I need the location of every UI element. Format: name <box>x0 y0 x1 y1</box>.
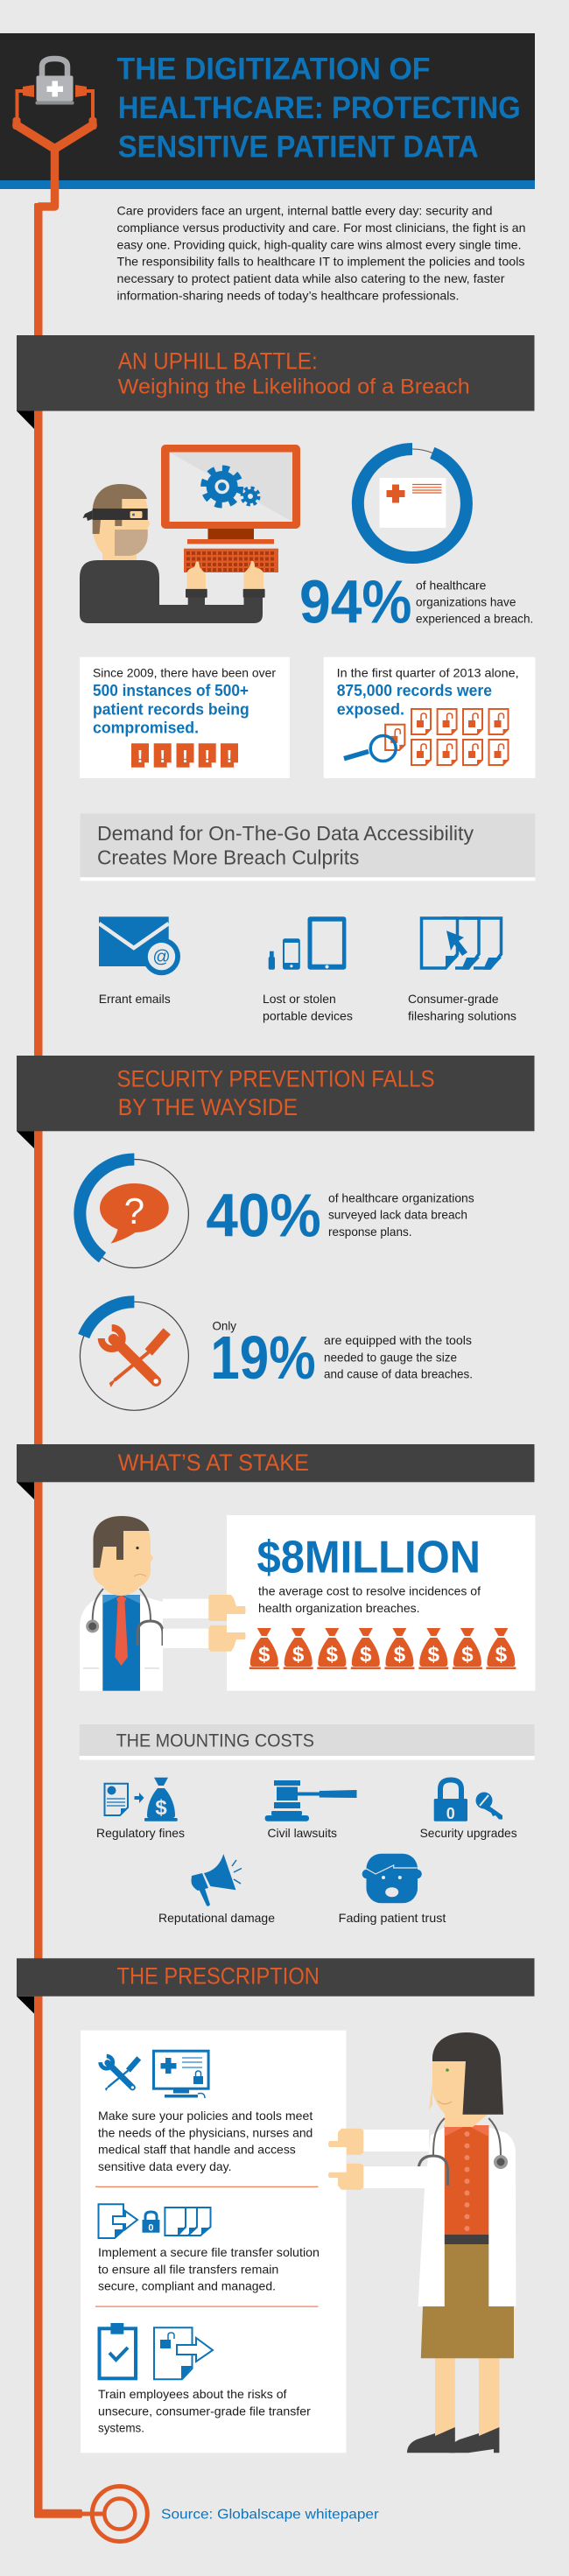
culprit: errant emails <box>99 916 180 1006</box>
icons: unlocked documents <box>385 709 508 765</box>
card: 875,000 records: exposed. <box>337 701 404 719</box>
icon: padlock and key: 0 <box>446 1805 455 1822</box>
stat: 19 percent: Only <box>212 1318 236 1332</box>
title: SENSITIVE PATIENT DATA <box>118 130 479 164</box>
step 1: the needs of the physicians, nurses and <box>98 2125 313 2139</box>
icons: money bags: $ <box>360 1643 372 1667</box>
section band: security prevention: BY THE WAYSIDE <box>118 1094 298 1120</box>
icon: shared files with cursor <box>422 918 502 970</box>
chart: 40 percent ring <box>80 1159 188 1267</box>
icon: medical monitor <box>154 2051 208 2098</box>
icons: alert documents: ! <box>137 748 143 767</box>
card: 8 million cost: the average cost to resolve incidences of <box>258 1584 481 1598</box>
cost: security upgrades <box>420 1780 517 1840</box>
title: HEALTHCARE: PROTECTING <box>118 91 521 125</box>
step 2: to ensure all file transfers remain <box>98 2262 278 2276</box>
illustration: male doctor <box>80 1516 245 1691</box>
culprit: portable devices <box>263 916 353 1022</box>
step 3 <box>98 2323 311 2435</box>
intro paragraph: Care providers face an urgent, internal battle every day: security and <box>117 204 492 218</box>
step 1: Make sure your policies and tools meet <box>98 2109 313 2123</box>
card: 875,000 records: 875,000 records were <box>337 682 492 699</box>
icon: magnifier <box>344 735 396 762</box>
stat: 94 percent: experienced a breach. <box>416 612 533 626</box>
hacker figure <box>80 484 265 623</box>
step 3: Train employees about the risks of <box>98 2387 287 2401</box>
culprit: filesharing solutions: Consumer-grade <box>408 992 499 1006</box>
icon: worried face <box>362 1854 422 1903</box>
arms <box>363 2130 429 2188</box>
section band: an uphill battle: Weighing the Likelihood of a Breach <box>118 375 470 398</box>
icon: gavel <box>265 1780 357 1821</box>
intro paragraph: necessary to protect patient data while also catering to the new, faster <box>117 271 505 285</box>
subheading: demand for data accessibility <box>81 813 535 881</box>
section band: security prevention <box>17 1056 534 1148</box>
stat: 94 percent: of healthcare <box>416 578 487 592</box>
cost: security upgrades: Security upgrades <box>420 1826 517 1840</box>
section band: security prevention: SECURITY PREVENTION FALLS <box>117 1066 434 1092</box>
skirt <box>421 2244 514 2358</box>
icon: stethoscope <box>418 2118 508 2186</box>
icon: megaphone <box>191 1854 242 1906</box>
culprit: filesharing solutions: filesharing solutions <box>408 1008 516 1022</box>
stat: 19 percent: 19% <box>210 1323 316 1392</box>
culprit: errant emails: Errant emails <box>99 992 171 1006</box>
intro cable stem <box>39 151 54 207</box>
hands <box>208 1595 245 1652</box>
illustration: hacker at computer <box>80 445 300 623</box>
section band: what's at stake <box>17 1444 534 1499</box>
icons: money bags: $ <box>428 1643 440 1667</box>
step 1: sensitive data every day. <box>98 2159 231 2173</box>
icons: alert documents: ! <box>159 748 165 767</box>
icons: money bags: $ <box>292 1643 305 1667</box>
section band: the prescription: THE PRESCRIPTION <box>117 1963 320 1990</box>
icon: blue tools <box>101 2056 139 2091</box>
header panel <box>0 33 535 210</box>
intro paragraph: compliance versus productivity and care. For most clinicians, the fight is an <box>117 221 525 235</box>
intro paragraph: The responsibility falls to healthcare IT to implement the policies and tools <box>117 255 525 269</box>
subheading: the mounting costs <box>80 1724 535 1760</box>
icons: money bags: $ <box>327 1643 339 1667</box>
title <box>117 53 521 164</box>
stat: 94 percent: organizations have <box>416 595 516 609</box>
stat: 40 percent: response plans. <box>328 1225 411 1239</box>
hands <box>328 2129 363 2190</box>
stat: 40 percent: 40% <box>206 1181 321 1249</box>
card: 500 instances: patient records being <box>93 701 249 719</box>
intro paragraph <box>117 204 525 302</box>
orange stethoscope cable line <box>34 203 42 2517</box>
chart: 19 percent ring <box>80 1302 188 1410</box>
section band: an uphill battle: AN UPHILL BATTLE: <box>118 348 318 375</box>
title: THE DIGITIZATION OF <box>117 53 431 87</box>
lab coat <box>418 2127 516 2306</box>
card: 500 instances <box>80 657 290 778</box>
icon: unsecure file transfer <box>154 2327 213 2380</box>
keyboard <box>184 549 278 572</box>
monitor <box>161 445 300 544</box>
stat: 19 percent: are equipped with the tools <box>324 1333 472 1347</box>
legs and shoes <box>407 2358 499 2453</box>
intro paragraph: information-sharing needs of today’s healthcare professionals. <box>117 288 459 302</box>
step 2: Implement a secure file transfer solution <box>98 2245 320 2259</box>
icon: question speech bubble: ? <box>124 1190 144 1232</box>
stat: 40 percent: of healthcare organizations <box>328 1190 474 1204</box>
icon: envelope: @ <box>152 947 171 966</box>
card: 500 instances: Since 2009, there have been over <box>93 665 276 679</box>
cost: reputational damage: Reputational damage <box>158 1911 275 1925</box>
icons: alert documents: ! <box>182 748 188 767</box>
icons: money bags: $ <box>258 1643 270 1667</box>
icon: wrench and screwdriver <box>102 1328 167 1387</box>
card: 875,000 records: In the first quarter of 2013 alone, <box>337 665 519 679</box>
subheading: the mounting costs: THE MOUNTING COSTS <box>116 1731 314 1751</box>
icons: alert documents: ! <box>204 748 210 767</box>
card: 500 instances: compromised. <box>93 719 199 736</box>
icon: usb phone tablet <box>269 916 346 970</box>
icons: money bags: $ <box>394 1643 406 1667</box>
card: 8 million cost: health organization breaches. <box>258 1601 420 1615</box>
icon: clipboard check <box>100 2323 136 2378</box>
panel: prescription steps <box>81 2031 346 2453</box>
icons: money bags <box>249 1628 516 1669</box>
cost: civil lawsuits: Civil lawsuits <box>268 1826 337 1840</box>
icons: alert documents: ! <box>227 748 232 767</box>
section band: an uphill battle <box>17 335 534 429</box>
card: 875,000 records <box>324 657 535 778</box>
step 1 <box>98 2051 313 2173</box>
illustration: female doctor <box>328 2032 516 2453</box>
icons: alert documents <box>131 743 238 768</box>
cost: regulatory fines <box>96 1778 185 1840</box>
stat: 94 percent: 94% <box>299 568 411 636</box>
section band: what's at stake: WHAT’S AT STAKE <box>118 1449 309 1476</box>
icon: secure file transfer: 0 <box>148 2223 153 2234</box>
culprit: portable devices: portable devices <box>263 1008 353 1022</box>
culprit: filesharing solutions <box>408 918 516 1022</box>
icon: stethoscope with padlock <box>12 59 96 210</box>
subheading: demand for data accessibility: Demand for On-The-Go Data Accessibility <box>97 822 474 845</box>
stat: 19 percent: needed to gauge the size <box>324 1350 457 1364</box>
step 2: secure, compliant and managed. <box>98 2279 276 2293</box>
stat: 19 percent <box>210 1318 473 1392</box>
source: Source: Globalscape whitepaper <box>161 2507 379 2522</box>
card: 8 million cost <box>227 1515 535 1691</box>
culprit: portable devices: Lost or stolen <box>263 992 336 1006</box>
icon: document to money bag: $ <box>155 1796 167 1820</box>
step 3: systems. <box>98 2421 144 2435</box>
cost: civil lawsuits <box>265 1780 357 1840</box>
step 2 <box>98 2204 320 2293</box>
arms <box>163 1599 210 1648</box>
subheading: demand for data accessibility: Creates More Breach Culprits <box>97 846 359 868</box>
intro paragraph: easy one. Providing quick, high-quality care wins almost every single time. <box>117 237 522 251</box>
step 3: unsecure, consumer-grade file transfer <box>98 2404 311 2418</box>
card: 500 instances: 500 instances of 500+ <box>93 682 249 699</box>
icon: stethoscope <box>86 1589 163 1646</box>
card: 8 million cost: $8MILLION <box>257 1533 481 1583</box>
stat: 40 percent: surveyed lack data breach <box>328 1208 467 1222</box>
cost: reputational damage <box>158 1854 275 1925</box>
cost: regulatory fines: Regulatory fines <box>96 1826 185 1840</box>
cost: fading patient trust: Fading patient trust <box>339 1911 446 1925</box>
icon: gears <box>204 468 259 505</box>
step 1: medical staff that handle and access <box>98 2143 296 2157</box>
stat: 94 percent <box>299 568 533 636</box>
stat: 19 percent: and cause of data breaches. <box>324 1367 473 1381</box>
icons: money bags: $ <box>495 1643 508 1667</box>
shirt <box>445 2125 488 2244</box>
icons: money bags: $ <box>461 1643 474 1667</box>
stat: 40 percent <box>206 1181 474 1249</box>
footer: cable end and source <box>34 2486 379 2542</box>
chart: 94 percent donut <box>358 449 467 558</box>
section band: the prescription <box>17 1958 534 2013</box>
icon: secure file transfer <box>98 2204 211 2238</box>
head and hair <box>429 2032 503 2127</box>
cost: fading patient trust <box>339 1854 446 1925</box>
